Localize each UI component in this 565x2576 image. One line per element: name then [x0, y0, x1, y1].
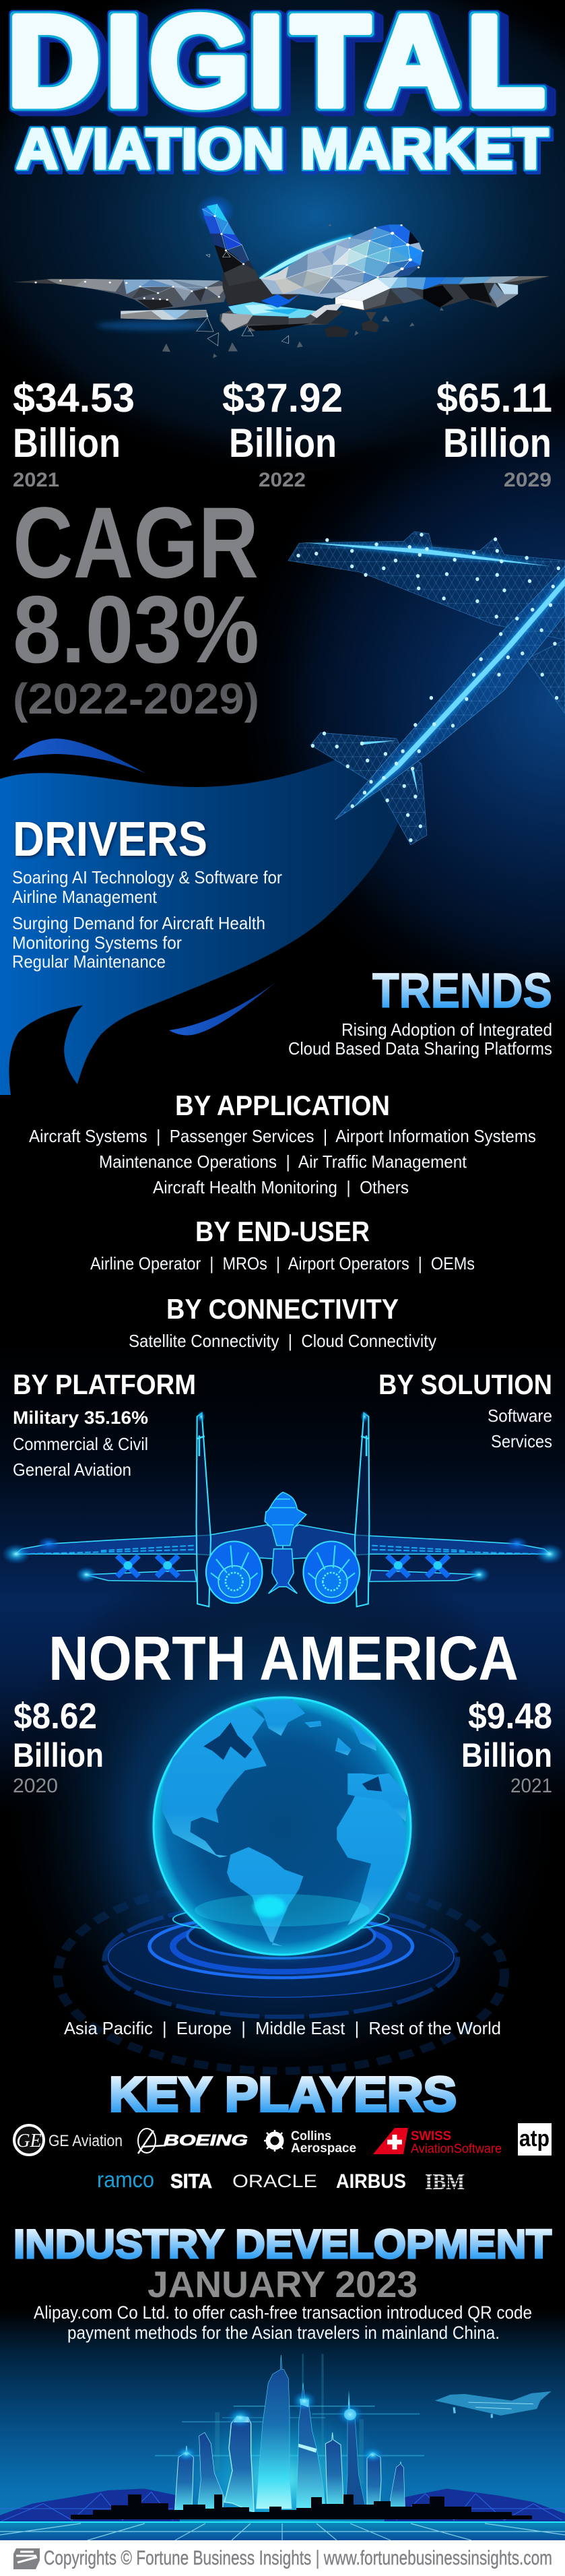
wire mesh overlay — [288, 532, 565, 845]
trends text block: Rising Adoption of Integrated — [341, 1019, 552, 1040]
fuselage belly — [220, 294, 379, 337]
canopy and body — [265, 1493, 306, 1546]
stat: 2021: $34.53 — [13, 375, 135, 420]
logo: Swiss AviationSoftware: AviationSoftware — [411, 2142, 502, 2156]
date heading: JANUARY 2023 — [147, 2263, 418, 2305]
logo: Swiss AviationSoftware: SWISS — [411, 2129, 451, 2143]
segment: by solution — [378, 1369, 552, 1451]
logo: GE Aviation: GE Aviation — [48, 2132, 123, 2150]
stat: 2029 — [436, 375, 552, 491]
logo: GE Aviation — [14, 2125, 123, 2155]
cagr value — [13, 486, 259, 723]
logo: Boeing: BOEING — [164, 2131, 248, 2149]
wing outline — [15, 1525, 283, 1559]
right wing — [335, 276, 550, 311]
segment: by solution: Services — [491, 1431, 552, 1451]
segment: by application: Maintenance Operations | Air Traffic Management — [99, 1152, 467, 1172]
illustration: wireframe plane — [288, 532, 565, 845]
left wing — [14, 279, 230, 310]
fuselage — [261, 224, 423, 299]
stat: 2022: Billion — [229, 420, 337, 466]
wing — [288, 532, 565, 640]
stat: 2022 — [222, 375, 343, 491]
segment: by connectivity: BY CONNECTIVITY — [166, 1293, 399, 1325]
stat: 2029: Billion — [443, 420, 552, 466]
drivers text block: Monitoring Systems for — [12, 933, 182, 953]
tailplane — [310, 732, 403, 787]
light streak glow — [302, 542, 565, 809]
main blue shape — [0, 760, 400, 1095]
far wing — [526, 640, 565, 714]
trends text block — [288, 964, 552, 1059]
stat: 2021: 2021 — [13, 469, 59, 491]
logo: Collins Aerospace: Collins — [291, 2129, 331, 2143]
stat: 2022: $37.92 — [222, 375, 343, 420]
segment: by platform — [13, 1369, 196, 1480]
segment: by end-user — [90, 1216, 475, 1274]
globe — [150, 1694, 414, 1958]
drivers text block: Regular Maintenance — [12, 951, 166, 972]
logo: Collins Aerospace: Aerospace — [291, 2141, 356, 2156]
tip glow — [2, 1544, 30, 1565]
stat: 2021: Billion — [13, 420, 121, 466]
rear body — [223, 274, 300, 305]
lower feather — [169, 982, 275, 1035]
lower tail — [378, 752, 427, 845]
logo: GE Aviation: GE — [16, 2131, 42, 2151]
stat: 2029: $65.11 — [436, 375, 552, 420]
heading: industry development: INDUSTRY DEVELOPMENT — [13, 2222, 552, 2267]
stat: 2020: Billion — [13, 1736, 104, 1774]
light dots — [298, 534, 558, 840]
continents — [162, 1699, 409, 1946]
illustration: futuristic city — [0, 2354, 565, 2554]
segment: by end-user: BY END-USER — [195, 1216, 370, 1247]
black skyline — [61, 2494, 532, 2519]
drivers text block: DRIVERS — [13, 813, 207, 867]
mesh hills — [0, 2488, 565, 2523]
stat: 2020: 2020 — [13, 1775, 58, 1797]
drivers text block: Soaring AI Technology & Software for — [12, 867, 282, 887]
segment: by application: Aircraft Health Monitoring | Others — [153, 1177, 409, 1197]
development text — [34, 2302, 532, 2343]
logo: SITA: SITA — [170, 2170, 212, 2193]
footer bar — [0, 2540, 565, 2576]
drivers text block — [12, 813, 282, 972]
tail fin — [202, 204, 261, 288]
segment: by solution: Software — [488, 1406, 552, 1426]
hologram rings — [58, 1879, 504, 2071]
footer logo — [13, 2548, 40, 2569]
logo: Collins Aerospace — [264, 2129, 356, 2156]
segment: by application: Aircraft Systems | Passenger Services | Airport Information Systems — [29, 1126, 536, 1146]
stat: 2020: $8.62 — [13, 1696, 97, 1736]
ground grid — [0, 2522, 565, 2540]
fuselage — [335, 567, 565, 820]
light streaks — [302, 542, 565, 809]
logo: Swiss AviationSoftware — [373, 2128, 502, 2156]
stat: 2021 regional: $9.48 — [468, 1696, 552, 1736]
segment: by platform: Military 35.16% — [13, 1408, 148, 1428]
illustration: fighter jet — [2, 1410, 564, 1606]
stat: 2021 — [13, 375, 135, 491]
logo: IBM: IBM — [425, 2170, 465, 2195]
logo: Airbus: AIRBUS — [336, 2170, 406, 2193]
stat: 2020 — [13, 1696, 104, 1797]
stat: 2021 regional — [461, 1696, 552, 1797]
stat: 2029: 2029 — [504, 469, 552, 491]
top feather — [13, 739, 146, 774]
illustration: low-poly airliner — [14, 194, 550, 358]
central pod — [269, 1549, 297, 1594]
title: Aviation Market: AVIATION MARKET — [16, 117, 548, 181]
drivers text block: Airline Management — [12, 887, 158, 907]
development text: payment methods for the Asian travelers in mainland China. — [67, 2323, 500, 2343]
drivers text block: Surging Demand for Aircraft Health — [12, 913, 265, 933]
segment: by end-user: Airline Operator | MROs | Airport Operators | OEMs — [90, 1253, 475, 1274]
segment: by application — [29, 1090, 536, 1197]
heading: key players: KEY PLAYERS — [109, 2068, 457, 2122]
segment: by application: BY APPLICATION — [175, 1090, 390, 1121]
engine — [206, 1541, 262, 1603]
stat: 2022: 2022 — [259, 469, 306, 491]
lower rail — [85, 1570, 197, 1581]
lower tailplane — [121, 310, 208, 320]
stat: 2021 regional: Billion — [461, 1736, 552, 1774]
towers — [155, 2354, 424, 2513]
region heading: NORTH AMERICA — [48, 1623, 519, 1693]
weapon pylons — [117, 1556, 178, 1577]
logo: Oracle: ORACLE — [232, 2171, 317, 2191]
central light bloom — [168, 2406, 397, 2554]
swoosh panel — [0, 739, 400, 1095]
floating fragments — [162, 224, 444, 358]
illustration: small jet — [435, 2391, 552, 2418]
segment: by connectivity — [129, 1293, 436, 1351]
cagr value: (2022-2029) — [13, 674, 259, 723]
logo: Boeing — [138, 2129, 248, 2154]
tail fin — [197, 1413, 211, 1606]
cagr value: 8.03% — [13, 576, 259, 683]
stat: 2021 regional: 2021 — [510, 1775, 552, 1797]
logo: ramco: ramco — [97, 2167, 154, 2192]
wing dots — [36, 216, 423, 300]
segment: by platform: Commercial & Civil — [13, 1434, 148, 1454]
segment: by connectivity: Satellite Connectivity | Cloud Connectivity — [129, 1331, 436, 1351]
logo: atp: atp — [519, 2126, 550, 2151]
cagr value: CAGR — [13, 486, 259, 599]
segment: by platform: BY PLATFORM — [13, 1369, 196, 1400]
segment: by platform: General Aviation — [13, 1459, 131, 1480]
other regions: Asia Pacific | Europe | Middle East | Rest of the World — [64, 2018, 501, 2038]
